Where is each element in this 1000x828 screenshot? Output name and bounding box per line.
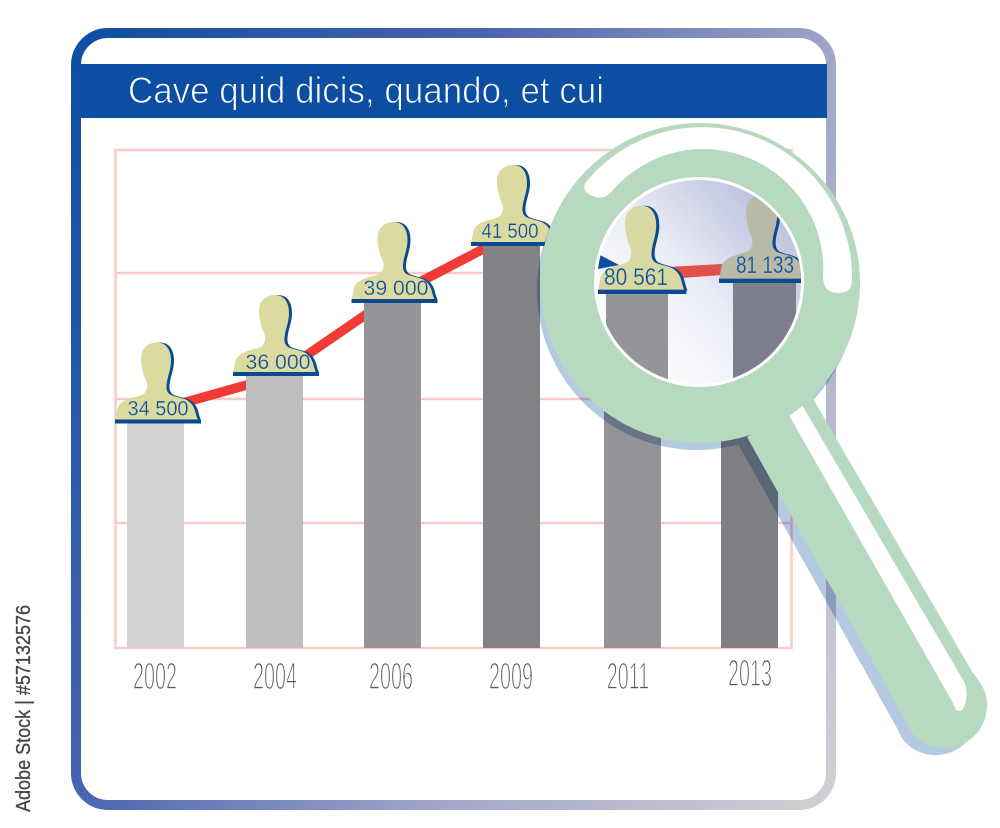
- title: Cave quid dicis, quando, et cui: [128, 70, 604, 111]
- ring highlight: [584, 127, 852, 293]
- person marker 2006: 39 000: [352, 222, 438, 303]
- bar 2009: [483, 245, 540, 648]
- bar 2004: [246, 375, 303, 648]
- person marker 2006: 39 000: 39 000: [364, 277, 428, 300]
- magnifying glass: [540, 123, 987, 748]
- lens ring: [540, 123, 860, 443]
- handle highlight: [782, 399, 967, 711]
- handle: [747, 397, 987, 748]
- lens background: [598, 180, 801, 384]
- bar 2013: [721, 380, 778, 648]
- magnified bar 2013: [733, 283, 796, 378]
- label 80 561: 80 561: [604, 264, 668, 291]
- person marker 2004: 36 000: [233, 295, 319, 376]
- stock credit: Adobe Stock | #57132576: [13, 605, 35, 812]
- red trend line: [165, 234, 512, 408]
- person marker 2009: 41 500: [471, 165, 557, 246]
- year labels: [133, 653, 772, 698]
- blue wedge: [598, 255, 619, 269]
- year labels: 2011: [607, 656, 649, 698]
- bar 2011: [604, 380, 661, 648]
- label 81 133: 81 133: [736, 252, 794, 279]
- year labels: 2006: [369, 656, 413, 698]
- magnifier shadow: [537, 130, 978, 755]
- rounded frame: [76, 33, 831, 805]
- header band: [81, 64, 827, 118]
- bar 2006: [364, 301, 421, 648]
- person marker 2009: 41 500: 41 500: [482, 220, 538, 243]
- bar chart: [127, 245, 778, 648]
- year labels: 2013: [728, 653, 772, 695]
- magnified person 81 133: [719, 196, 801, 283]
- lens white border: [594, 177, 804, 387]
- magnified lens content: [598, 180, 801, 384]
- year labels: 2009: [489, 656, 533, 698]
- magnified bar 2011: [606, 294, 668, 380]
- person marker 2002: 34 500: [115, 342, 201, 424]
- person marker 2004: 36 000: 36 000: [246, 351, 310, 374]
- bar 2002: [127, 423, 184, 648]
- magnified person 80 561: [598, 206, 687, 294]
- person marker 2002: 34 500: 34 500: [128, 398, 188, 420]
- chart grid: [115, 150, 792, 648]
- year labels: 2004: [253, 656, 297, 698]
- magnified red line: [672, 264, 722, 278]
- year labels: 2002: [133, 656, 177, 698]
